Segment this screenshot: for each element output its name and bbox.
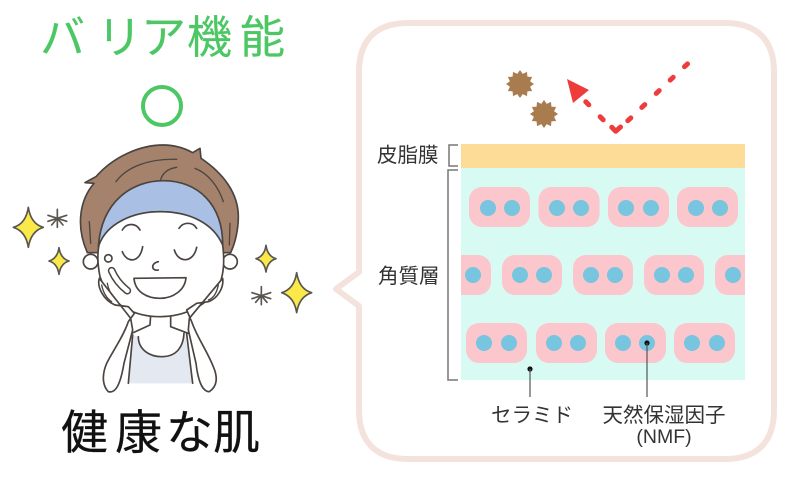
hair — [80, 145, 238, 253]
hair strands — [89, 159, 230, 245]
sparkle right small — [256, 245, 276, 272]
sparkle left large — [13, 207, 43, 247]
ears — [83, 254, 98, 269]
nose — [153, 262, 158, 270]
label: stratum corneum: 角質層 — [378, 265, 440, 288]
icon: green circle mark — [143, 87, 181, 125]
leader line: ceramide — [527, 366, 533, 397]
label: sebum film: 皮脂膜 — [377, 144, 438, 167]
label: natural moisturizing factor: (NMF) — [636, 426, 692, 448]
cell row 3 — [466, 323, 735, 363]
label: natural moisturizing factor: 天然保湿因子 — [602, 404, 726, 427]
eyes — [122, 247, 197, 260]
right hand and arm — [187, 278, 223, 392]
sebum film layer — [461, 144, 745, 168]
arrow: deflected red dashed arrow — [567, 64, 688, 131]
face — [98, 212, 224, 317]
asterisk right — [252, 287, 271, 305]
panel: speech bubble — [336, 23, 774, 459]
cell row 1 — [469, 187, 738, 227]
label: natural moisturizing factor — [602, 404, 726, 448]
cream dot — [105, 255, 112, 262]
asterisk left — [48, 209, 67, 227]
title: barrier function: バリア機能 — [40, 1, 285, 66]
illustration: smiling woman with sparkles — [13, 145, 312, 392]
stratum corneum layer — [461, 168, 745, 380]
headband — [98, 181, 223, 248]
sparkle left small — [49, 248, 69, 274]
eyebrows — [122, 223, 197, 230]
neck and shoulders — [128, 315, 193, 383]
left hand and arm — [99, 278, 134, 392]
leader line: NMF — [644, 340, 650, 397]
sparkle right large — [282, 273, 312, 313]
icon: dust particle lower — [530, 100, 558, 128]
cream streak — [112, 271, 127, 291]
icon: dust particle upper — [506, 70, 534, 98]
caption: healthy skin: 健康な肌 — [61, 394, 260, 463]
cell row 2 — [461, 255, 745, 295]
tank top — [128, 333, 193, 383]
bracket: sebum film — [449, 145, 458, 166]
mouth — [134, 278, 186, 298]
label: ceramide: セラミド — [491, 404, 573, 427]
bracket: stratum corneum — [448, 170, 458, 380]
